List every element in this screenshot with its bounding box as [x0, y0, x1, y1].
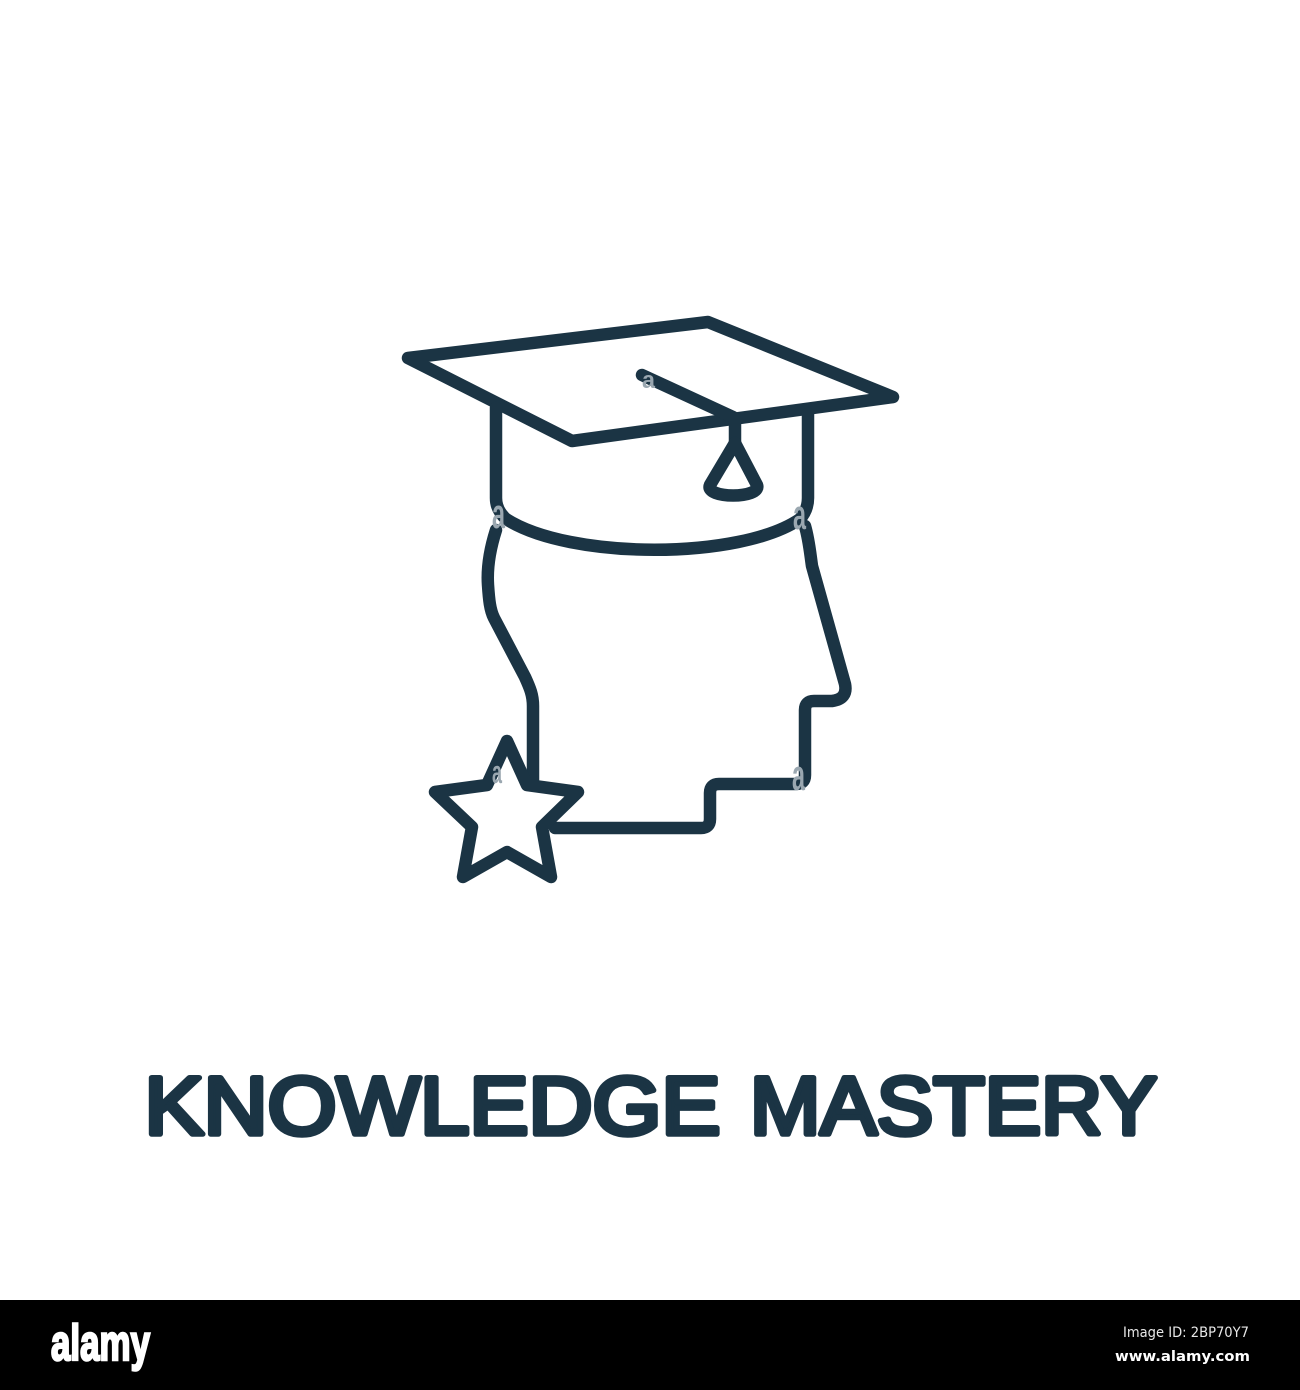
icon: tassel — [710, 422, 757, 496]
icon: head profile — [488, 526, 845, 828]
title: MASTERY — [750, 1061, 1157, 1152]
icon: graduation cap — [408, 322, 893, 550]
watermark marks: a — [642, 367, 656, 394]
watermark marks: a — [492, 754, 502, 790]
icon: knowledge mastery — [408, 322, 893, 877]
footer band — [0, 1300, 1300, 1390]
title — [144, 1061, 1157, 1152]
watermark marks: a — [792, 751, 805, 800]
logo: alamy: alamy — [51, 1315, 150, 1371]
image id: Image ID: 2BP70Y7 — [1123, 1325, 1249, 1341]
watermark marks: a — [492, 490, 505, 537]
website: www.alamy.com — [1115, 1349, 1250, 1365]
title: KNOWLEDGE — [144, 1061, 720, 1152]
watermark marks — [492, 367, 806, 800]
icon: star — [435, 741, 578, 877]
watermark marks: a — [793, 491, 806, 538]
